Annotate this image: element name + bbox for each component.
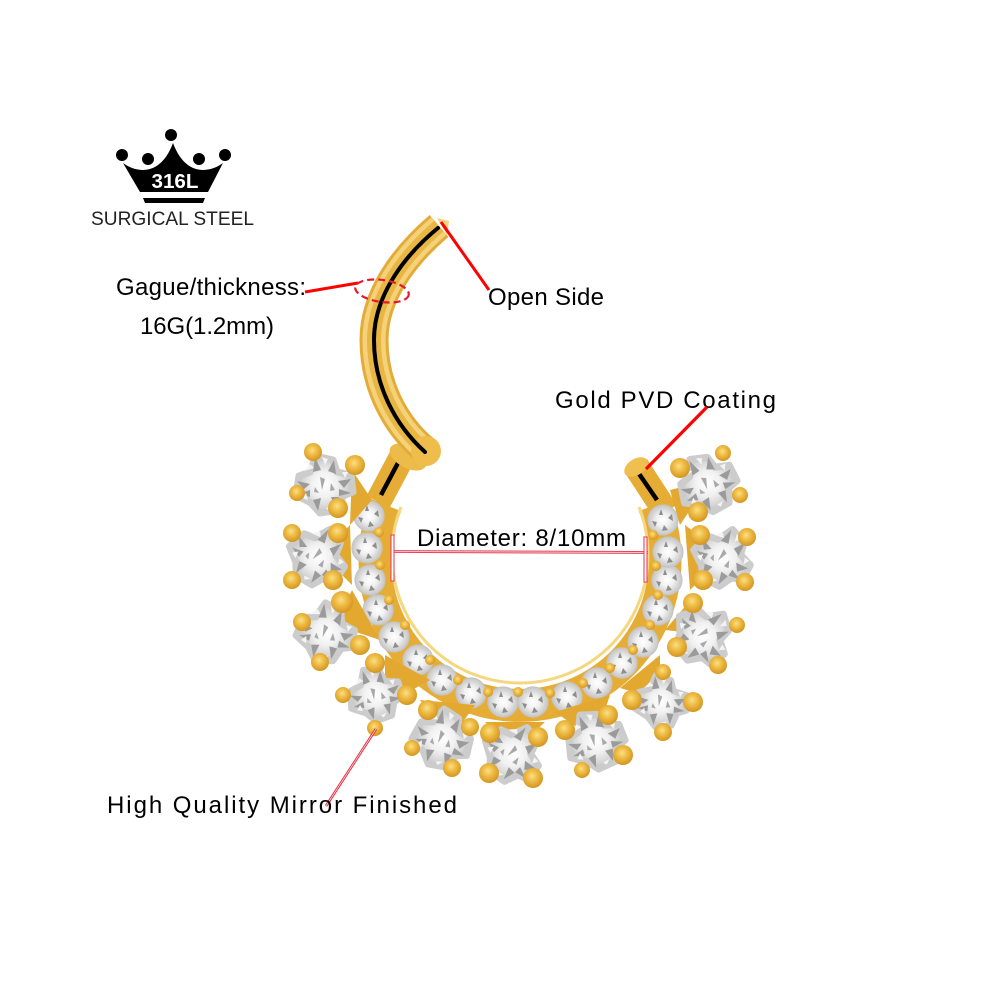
hinged segment of the ring [374,218,449,476]
large stones with prongs [278,443,763,794]
icon: crown [116,129,231,203]
callout: gauge / thickness: 16G(1.2mm) [140,313,274,340]
logo: 316L surgical steel crown [91,129,254,230]
callout: open side [441,222,604,311]
icon: crown: 316L [152,171,198,193]
callout: diameter dimension: Diameter: 8/10mm [417,525,626,552]
callout: diameter dimension [391,525,648,582]
callout: gauge / thickness [116,274,410,340]
ring body: gold crescent [375,453,666,705]
callout: gold PVD coating: Gold PVD Coating [555,387,776,414]
callout: gold PVD coating [555,387,776,469]
callout: gauge / thickness: Gague/thickness: [116,274,306,301]
callout: high quality mirror finished [107,729,457,819]
callout: open side: Open Side [488,284,604,311]
callout: high quality mirror finished: High Quality Mirror Finished [107,792,457,819]
logo text: SURGICAL STEEL [91,209,254,230]
small pave stones on the band [352,501,683,717]
